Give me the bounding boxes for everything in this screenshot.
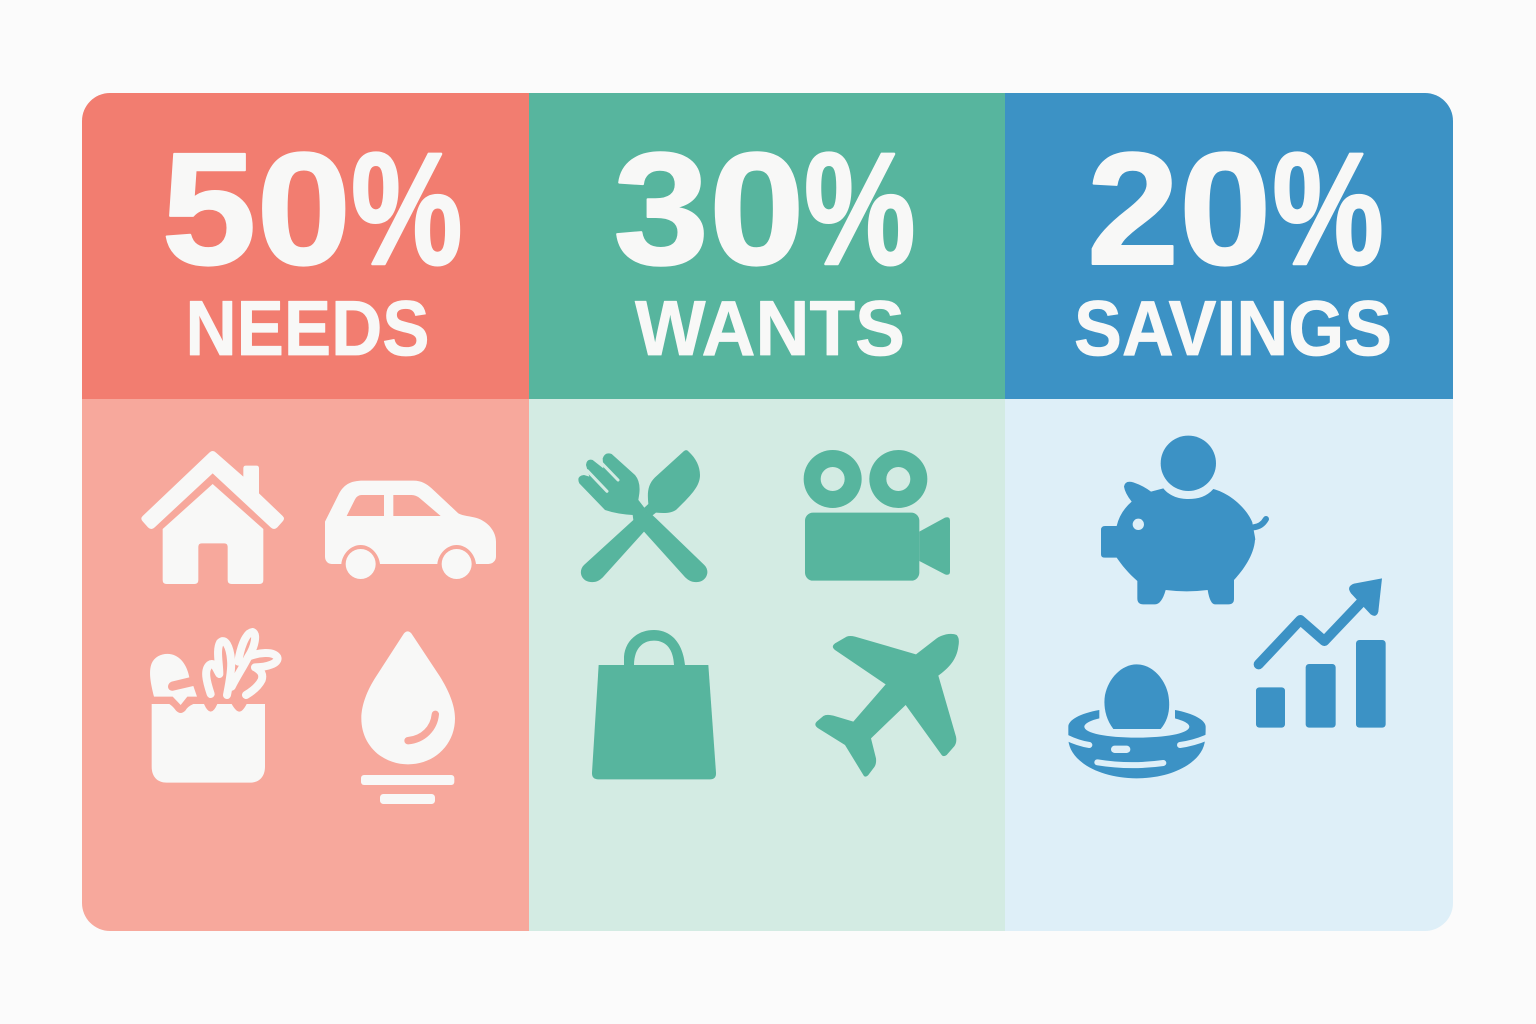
heading: needs: NEEDS (186, 284, 430, 372)
infographic (82, 93, 1453, 931)
icon: movie camera (804, 450, 950, 581)
icon: fork and knife (578, 450, 707, 582)
heading: 50%: 50 (162, 119, 351, 298)
icon: shopping bag (592, 630, 716, 779)
panel: wants header (529, 93, 1005, 399)
icon: piggy bank with coin (1101, 436, 1266, 604)
heading: 20% (1087, 119, 1384, 298)
heading: 30%: 30 (613, 119, 805, 298)
heading: 20%: 20 (1087, 119, 1271, 298)
heading: 20%: % (1272, 119, 1384, 298)
icon: rising bar chart (1256, 578, 1386, 728)
icon: house (141, 451, 284, 584)
panel: savings header (1005, 93, 1453, 399)
icon: nest egg (1067, 664, 1207, 778)
icon: water drop (361, 631, 455, 804)
heading: 50%: % (351, 119, 462, 298)
icon: car (325, 481, 496, 579)
panel: wants body (529, 399, 1005, 931)
icon: airplane (815, 634, 959, 777)
panel: needs body (82, 399, 529, 931)
heading: savings: SAVINGS (1074, 284, 1392, 372)
panel: savings body (1005, 399, 1453, 931)
heading: wants: WANTS (635, 284, 905, 372)
heading: 50% (162, 119, 462, 298)
icon: groceries (150, 632, 278, 783)
heading: 30% (613, 119, 916, 298)
panel: needs header (82, 93, 529, 399)
heading: 30%: % (804, 119, 916, 298)
budget table (82, 93, 1453, 931)
